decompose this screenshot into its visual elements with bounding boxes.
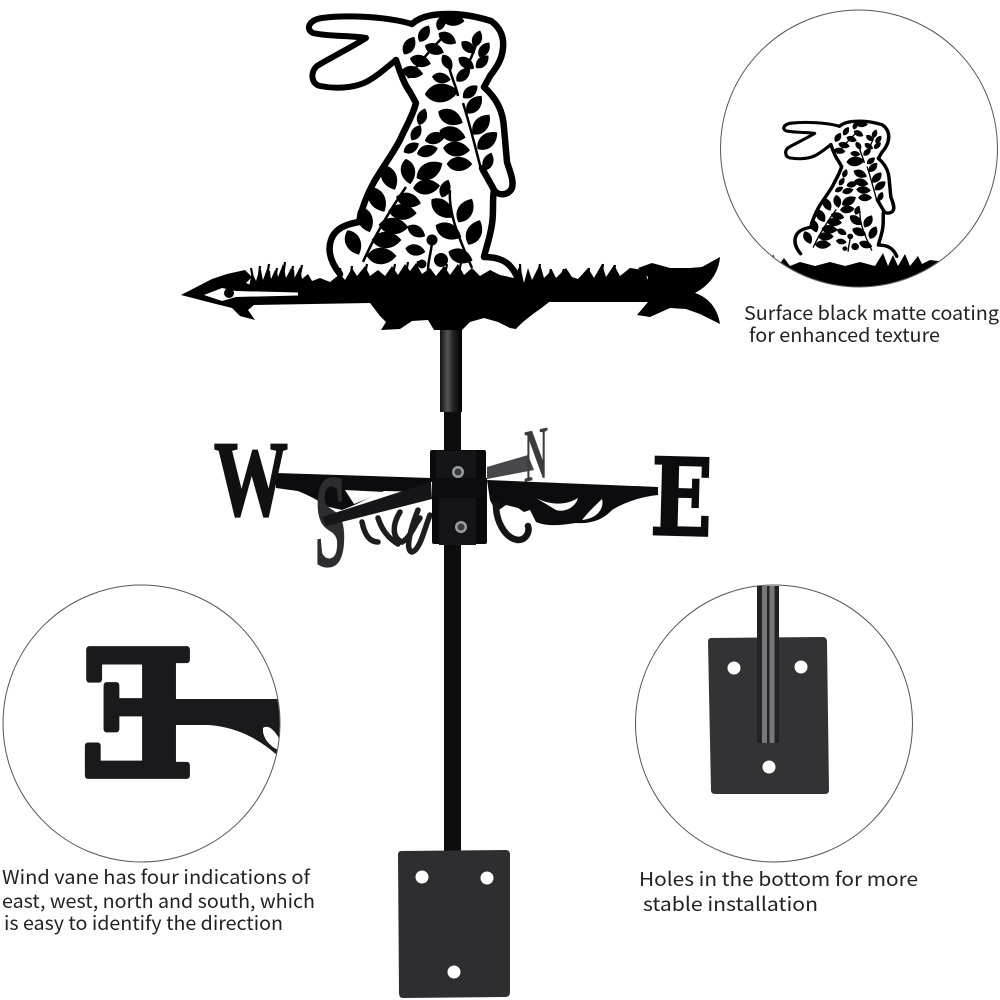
lower clamp [432, 498, 487, 545]
south scrollwork [362, 510, 430, 552]
panel: matte coating detail [720, 10, 998, 295]
grass blades [251, 261, 629, 288]
base plate [398, 850, 510, 998]
mirrored letter E: E [80, 614, 194, 817]
foliage stems [363, 36, 482, 270]
arrow body and tail [181, 257, 720, 330]
panel: direction letter detail [3, 585, 282, 862]
foliage pattern [341, 10, 502, 269]
east arm [487, 480, 658, 525]
letter E: E [649, 436, 714, 562]
arm cut-out [262, 726, 279, 750]
arrow eye [224, 288, 234, 298]
screw upper [452, 466, 464, 478]
rabbit figure [309, 10, 518, 279]
grass body [248, 263, 648, 292]
caption: matte coating [744, 299, 999, 348]
caption: direction indications: is easy to identify the direction [4, 909, 283, 936]
caption: direction indications: east, west, north and south, which [2, 887, 315, 914]
east scroll [496, 505, 529, 540]
arrow white inlay [204, 288, 298, 301]
west arm cut-out [345, 490, 384, 504]
east arm cut-outs [536, 498, 602, 520]
main pole [440, 330, 462, 852]
letter W: W [214, 420, 288, 538]
small grass [772, 253, 939, 286]
small rabbit [784, 119, 897, 256]
caption: holes [639, 865, 918, 917]
letter N: N [524, 410, 548, 499]
north arm [487, 455, 534, 479]
caption: direction indications [2, 863, 315, 936]
arrow vane with grass [181, 257, 720, 330]
caption: holes: Holes in the bottom for more [639, 865, 918, 892]
caption: direction indications: Wind vane has four indications of [2, 863, 311, 890]
south arm [322, 482, 432, 526]
compass arms [214, 410, 714, 596]
caption: holes: stable installation [643, 890, 818, 917]
caption: matte coating: Surface black matte coating [744, 299, 999, 326]
plate [708, 637, 829, 794]
caption: matte coating: for enhanced texture [749, 321, 940, 348]
arm to mirrored E [176, 699, 280, 754]
centre junction [432, 478, 487, 502]
upper clamp [430, 450, 486, 482]
panel: mounting plate detail [636, 585, 912, 862]
letter S: S [315, 447, 346, 596]
west arm [276, 473, 431, 510]
rod [757, 586, 779, 743]
screw lower [455, 521, 467, 533]
